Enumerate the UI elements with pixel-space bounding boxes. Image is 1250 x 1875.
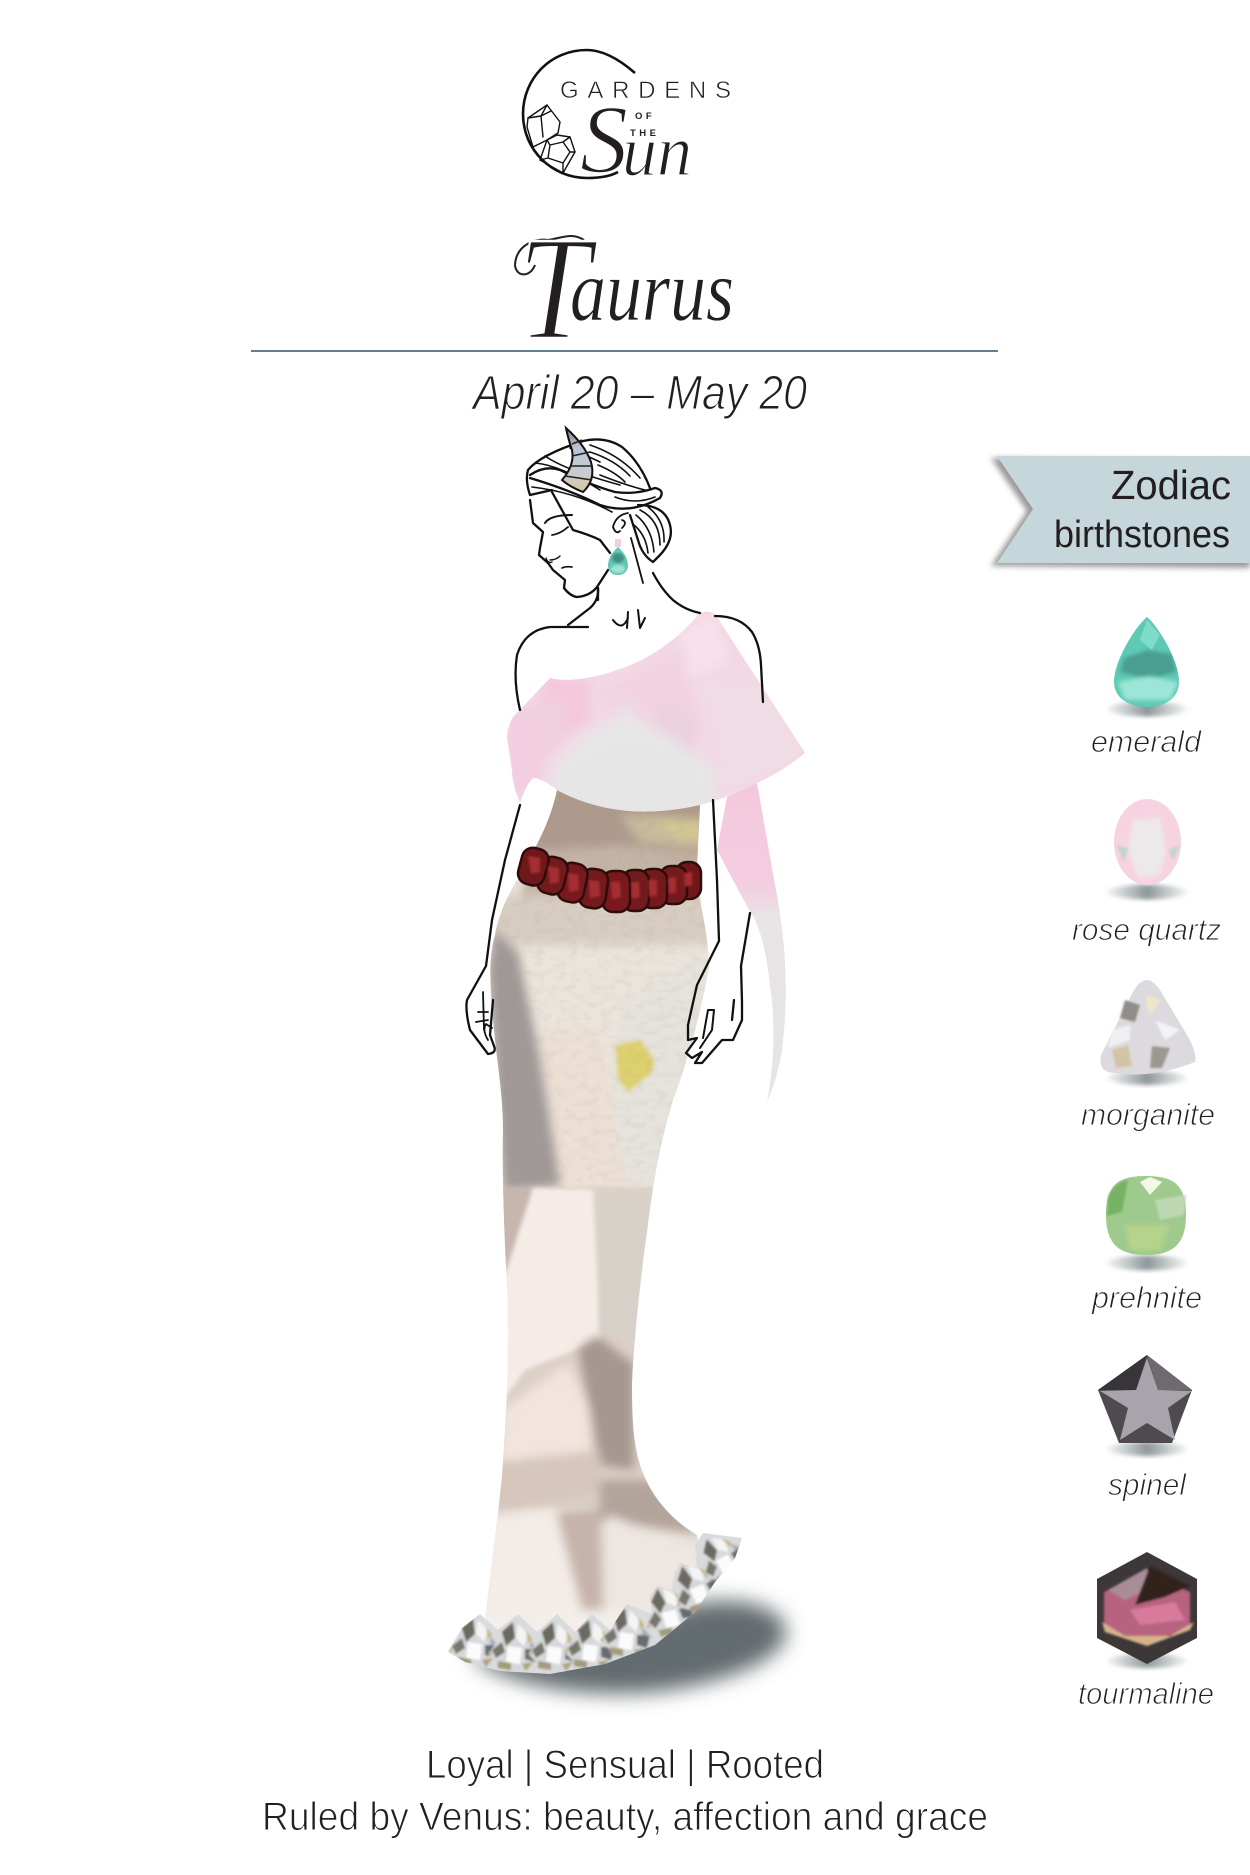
lower skirt	[487, 1510, 581, 1610]
cape ruffle	[507, 612, 805, 812]
banner text: Zodiac	[1111, 462, 1231, 508]
torso fabric	[536, 790, 700, 862]
gem: tourmaline	[1097, 1552, 1197, 1668]
cape pale centre	[548, 703, 717, 815]
hem of white gemstones	[448, 1533, 742, 1674]
ruby belt	[516, 845, 701, 912]
gem: prehnite	[1106, 1176, 1188, 1270]
gem: emerald	[1106, 615, 1188, 716]
traits line: Loyal | Sensual | Rooted	[426, 1743, 824, 1787]
woven fabric grain	[528, 945, 704, 1188]
logo script Sun: S	[580, 86, 628, 194]
mid panel	[498, 1188, 662, 1507]
ruling planet line: Ruled by Venus: beauty, affection and grace	[262, 1795, 988, 1839]
gown skirt	[486, 790, 709, 1632]
logo crystals	[527, 105, 575, 173]
banner: Zodiac birthstones: birthstones	[1054, 514, 1230, 556]
face	[530, 492, 628, 600]
banner shadow	[991, 458, 1250, 568]
horn ornament	[562, 428, 593, 492]
dark wedge	[578, 1336, 634, 1470]
dark grey streak	[488, 930, 560, 1191]
logo script Sun	[580, 86, 692, 194]
label: tourmaline: tourmaline	[1078, 1676, 1214, 1711]
label: emerald: emerald	[1091, 724, 1203, 759]
gem: morganite	[1100, 980, 1195, 1085]
date range: April 20 – May 20	[470, 367, 807, 420]
ground shadow under gown	[468, 1601, 786, 1694]
beads	[516, 845, 701, 912]
label: morganite: morganite	[1081, 1097, 1215, 1132]
logo script Sun: un	[622, 111, 692, 191]
title: Taurus: T	[518, 207, 598, 371]
cape washes	[542, 678, 590, 732]
divider line	[251, 350, 998, 352]
logo word OF: OF	[635, 111, 655, 122]
gem: rose quartz	[1106, 799, 1188, 900]
logo word THE: THE	[630, 128, 660, 139]
title: Taurus: aurus	[570, 243, 734, 340]
figure line art: body and arms	[466, 538, 763, 1063]
label: spinel: spinel	[1108, 1467, 1187, 1502]
hair	[527, 439, 671, 562]
banner: Zodiac birthstones	[991, 456, 1250, 568]
logo wordmark GARDENS: GARDENS	[560, 77, 731, 104]
label: prehnite: prehnite	[1091, 1280, 1202, 1315]
yellow spot	[616, 1040, 654, 1092]
figure head and hair	[527, 428, 671, 600]
gem: spinel	[1098, 1355, 1192, 1456]
label: rose quartz: rose quartz	[1072, 912, 1221, 947]
title: Taurus	[515, 207, 734, 371]
bead highlights	[528, 856, 692, 899]
teardrop earring	[608, 539, 628, 575]
logo: Gardens of the Sun	[523, 50, 731, 194]
flowing sash	[717, 783, 786, 1102]
